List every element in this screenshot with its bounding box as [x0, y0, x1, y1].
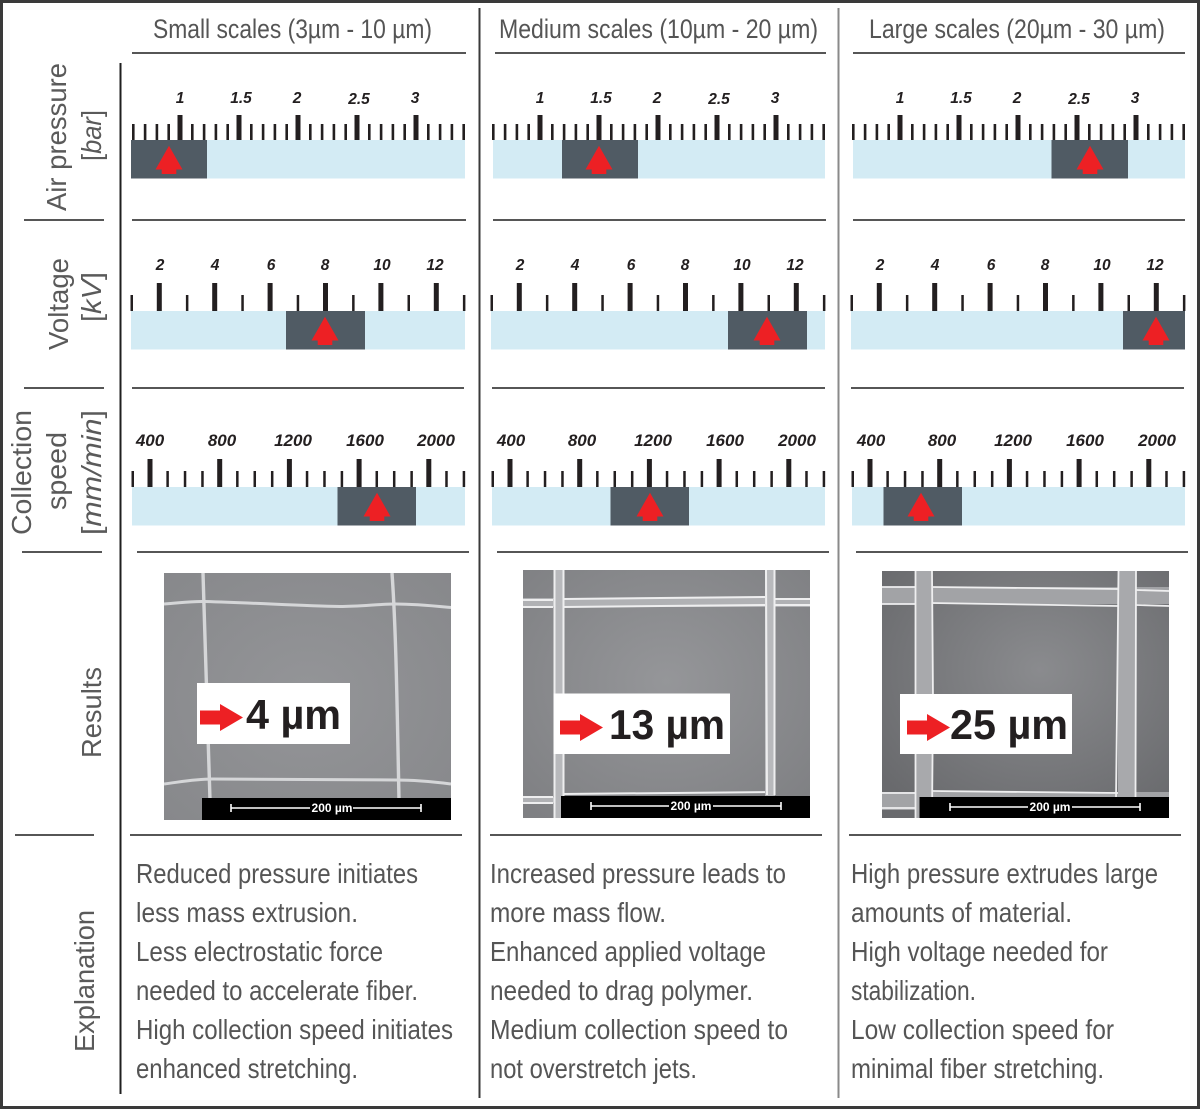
explanation: medium scales: not overstretch jets. [490, 1053, 697, 1084]
explanation: large scales: minimal fiber stretching. [851, 1053, 1104, 1084]
explanation: large scales [851, 858, 1158, 1084]
air pressure scale: large: 1 [896, 90, 904, 107]
explanation: medium scales: Medium collection speed to [490, 1014, 788, 1045]
value label: 25 µm: 25 µm [950, 701, 1068, 748]
collection speed scale: medium: 800 [568, 431, 597, 450]
row label: voltage [43, 258, 107, 350]
value label: 13 µm: 13 µm [609, 701, 725, 748]
voltage scale: small: 2 [155, 257, 165, 274]
explanation: large scales: stabilization. [851, 975, 976, 1006]
marker arrow [312, 317, 338, 345]
air pressure scale: medium: 1.5 [590, 90, 612, 107]
voltage scale: large: 6 [987, 257, 996, 274]
heading: medium scales: Medium scales (10µm - 20 µm) [499, 14, 818, 44]
row label: air pressure: [bar] [76, 110, 107, 161]
air pressure scale: large: 2.5 [1067, 91, 1090, 108]
explanation: medium scales: Enhanced applied voltage [490, 936, 766, 967]
explanation: small scales: enhanced stretching. [136, 1053, 358, 1084]
value label: 13 µm [554, 694, 730, 754]
collection speed scale: large: 400 [856, 431, 886, 450]
voltage scale: small: 12 [426, 257, 444, 274]
row labels [6, 63, 107, 1052]
collection speed scale: large: 1200 [994, 431, 1032, 450]
collection speed scale: small: 2000 [416, 431, 455, 450]
voltage scale: medium: 8 [681, 257, 690, 274]
panel: large scales column [849, 14, 1188, 1084]
air pressure scale: small [131, 90, 466, 178]
explanation: small scales: less mass extrusion. [136, 897, 358, 928]
voltage scale: large: 2 [875, 257, 885, 274]
micrograph: 4 µm fibers [164, 573, 451, 820]
row label: voltage: Voltage [43, 258, 74, 350]
explanation: medium scales [490, 858, 788, 1084]
scale bar [591, 799, 781, 813]
marker arrow [364, 493, 390, 521]
scale bar [231, 801, 421, 815]
row label: voltage: [kV] [76, 272, 107, 322]
row label: results: Results [76, 667, 107, 758]
air pressure scale: medium: 3 [771, 90, 780, 107]
marker arrow [754, 317, 780, 345]
air pressure scale: large: 2 [1012, 90, 1022, 107]
voltage scale: medium [490, 257, 826, 350]
heading: small scales: Small scales (3µm - 10 µm) [153, 14, 432, 44]
air pressure scale: large: 1.5 [950, 90, 972, 107]
row label: air pressure [41, 63, 107, 211]
collection speed scale: small: 400 [135, 431, 165, 450]
air pressure scale: large: 3 [1131, 90, 1140, 107]
collection speed scale: medium: 400 [496, 431, 526, 450]
voltage scale: large: 12 [1146, 257, 1164, 274]
voltage scale: medium: 4 [570, 257, 580, 274]
collection speed scale: small: 1200 [274, 431, 312, 450]
air pressure scale: medium: 2 [652, 90, 662, 107]
explanation: small scales: Less electrostatic force [136, 936, 383, 967]
explanation: large scales: Low collection speed for [851, 1014, 1114, 1045]
voltage scale: small: 4 [210, 257, 220, 274]
collection speed scale: large: 800 [928, 431, 957, 450]
value label: 4 µm [197, 683, 350, 744]
voltage scale: small: 8 [321, 257, 330, 274]
explanation: small scales: Reduced pressure initiates [136, 858, 418, 889]
air pressure scale: small: 1 [176, 90, 184, 107]
explanation: medium scales: needed to drag polymer. [490, 975, 753, 1006]
collection speed scale: small: 1600 [346, 431, 384, 450]
voltage scale: small [130, 257, 466, 350]
air pressure scale: medium: 1 [536, 90, 544, 107]
explanation: small scales [136, 858, 453, 1084]
collection speed scale: large: 2000 [1137, 431, 1176, 450]
scale bar [950, 800, 1140, 814]
marker arrow [636, 493, 664, 521]
scale bar: 200 µm [312, 801, 352, 815]
voltage scale: large: 10 [1093, 257, 1111, 274]
voltage scale: large [850, 257, 1186, 350]
row label: collection speed: speed [41, 432, 72, 510]
voltage scale: small: 10 [373, 257, 391, 274]
voltage scale: medium: 6 [627, 257, 636, 274]
explanation: large scales: High pressure extrudes large [851, 858, 1158, 889]
voltage scale: medium: 12 [786, 257, 804, 274]
panel: medium scales column [490, 14, 829, 1084]
panel: small scales column [130, 14, 469, 1084]
row label: collection speed: [mm/min] [76, 410, 107, 535]
scale bar: 200 µm [671, 799, 711, 813]
collection speed scale: medium: 1600 [706, 431, 744, 450]
collection speed scale: medium [492, 431, 826, 526]
air pressure scale: small: 2.5 [347, 91, 370, 108]
row label: collection speed: Collection [6, 410, 37, 535]
marker arrow [908, 493, 934, 521]
voltage scale: medium: 10 [733, 257, 751, 274]
value label: 25 µm [900, 694, 1072, 754]
marker arrow [586, 146, 612, 174]
micrograph: 25 µm fibers [882, 571, 1169, 818]
row label: air pressure: Air pressure [41, 63, 72, 211]
voltage scale: medium: 2 [515, 257, 525, 274]
voltage scale: small: 6 [267, 257, 276, 274]
air pressure scale: small: 1.5 [230, 90, 252, 107]
collection speed scale: large: 1600 [1066, 431, 1104, 450]
explanation: medium scales: more mass flow. [490, 897, 666, 928]
marker arrow [1142, 317, 1170, 345]
collection speed scale: large [852, 431, 1186, 526]
micrograph: 13 µm fibers [523, 570, 810, 818]
explanation: medium scales: Increased pressure leads to [490, 858, 786, 889]
collection speed scale: small [132, 431, 466, 526]
row label: explanation: Explanation [69, 910, 100, 1052]
explanation: large scales: High voltage needed for [851, 936, 1108, 967]
collection speed scale: medium: 1200 [634, 431, 672, 450]
marker arrow [156, 146, 182, 174]
air pressure scale: small: 3 [411, 90, 420, 107]
air pressure scale: medium [492, 90, 826, 178]
explanation: small scales: needed to accelerate fiber. [136, 975, 418, 1006]
value label: 4 µm: 4 µm [246, 691, 341, 738]
marker arrow [1076, 146, 1104, 174]
voltage scale: large: 4 [930, 257, 940, 274]
explanation: small scales: High collection speed initiates [136, 1014, 453, 1045]
explanation: large scales: amounts of material. [851, 897, 1072, 928]
scale bar: 200 µm [1030, 800, 1070, 814]
collection speed scale: small: 800 [208, 431, 237, 450]
air pressure scale: small: 2 [292, 90, 302, 107]
row label: collection speed [6, 410, 107, 535]
air pressure scale: large [852, 90, 1186, 178]
air pressure scale: medium: 2.5 [707, 91, 730, 108]
voltage scale: large: 8 [1041, 257, 1050, 274]
collection speed scale: medium: 2000 [777, 431, 816, 450]
